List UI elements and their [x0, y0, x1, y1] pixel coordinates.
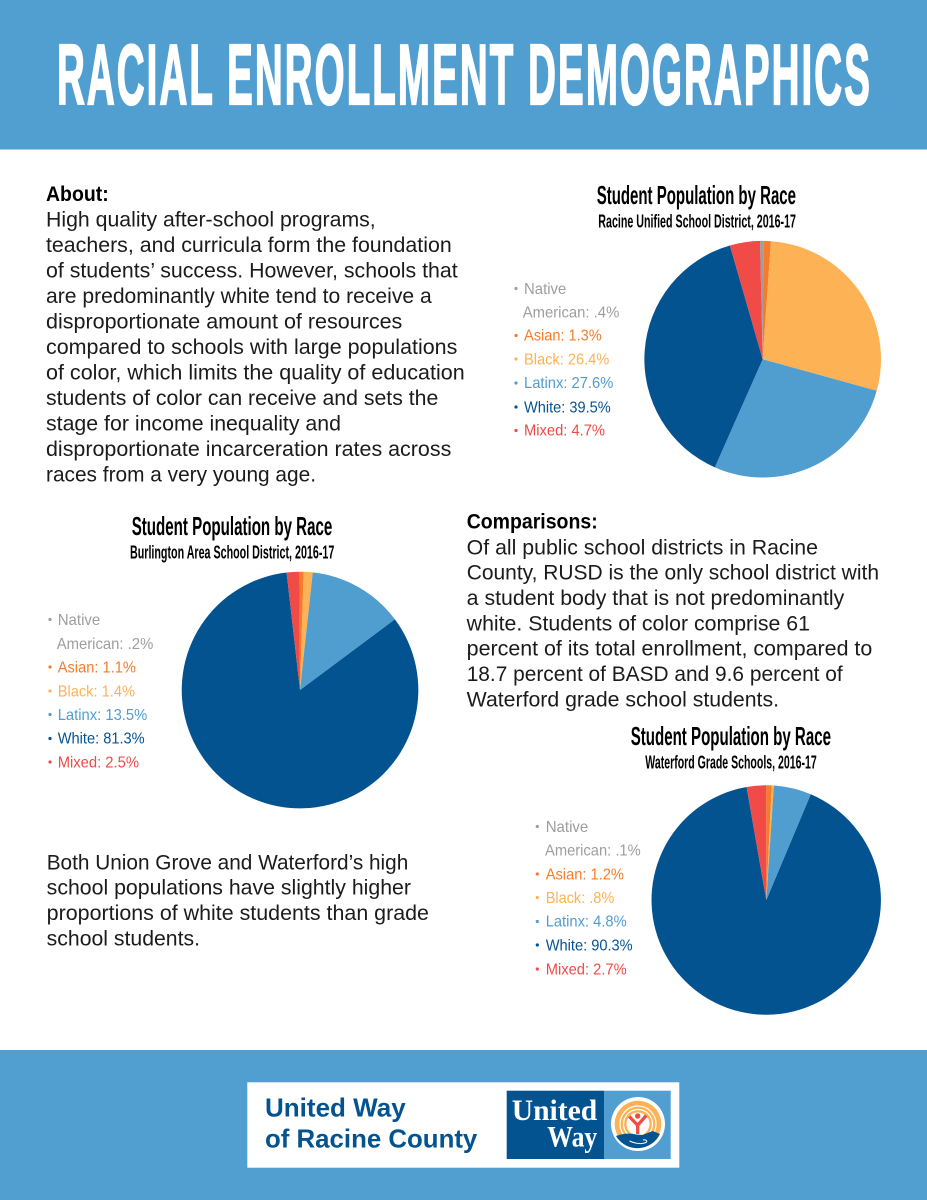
pie chart: Burlington [182, 572, 418, 808]
text block: about: students of color can receive and sets the [46, 387, 438, 410]
legend: Racine: Mixed: 4.7% [524, 423, 605, 440]
text block: high school note: Both Union Grove and Waterford’s high [47, 851, 408, 874]
text block: high school note: school populations have slightly higher [47, 877, 411, 900]
text block: comparisons: Of all public school districts in Racine [467, 536, 818, 559]
legend: Racine: Latinx: 27.6% [524, 375, 613, 392]
chart panel: Racine Unified School District [514, 180, 881, 477]
legend: Waterford: Asian: 1.2% [546, 866, 624, 883]
United Way logo: Way [547, 1121, 597, 1154]
chart panel: Burlington Area School District [48, 511, 418, 808]
legend: Racine: Native [524, 281, 566, 298]
legend: Burlington: White: 81.3% [58, 731, 145, 748]
organization name [265, 1093, 478, 1153]
chart heading: Burlington [130, 511, 334, 562]
legend: Racine [514, 281, 619, 440]
title: RACIAL ENROLLMENT DEMOGRAPHICS [57, 28, 872, 123]
text block: high school note: school students. [47, 927, 200, 950]
legend: Waterford: Mixed: 2.7% [546, 961, 627, 978]
pie chart: Waterford [652, 785, 881, 1015]
text block: about: About: [46, 183, 109, 206]
text block: comparisons: County, RUSD is the only school district with [467, 562, 879, 585]
legend: Burlington: Black: 1.4% [58, 683, 135, 700]
organization name: of Racine County [265, 1123, 478, 1153]
legend: Waterford: Latinx: 4.8% [546, 914, 627, 931]
text block: comparisons: 18.7 percent of BASD and 9.6 percent of [467, 663, 843, 686]
legend: Burlington: Asian: 1.1% [58, 660, 136, 677]
text block: comparisons: percent of its total enrollment, compared to [467, 638, 872, 661]
text block: comparisons: Waterford grade school students. [467, 688, 779, 711]
text block: about [46, 183, 465, 486]
text block: about: compared to schools with large populations [46, 336, 457, 359]
legend: Burlington: American: .2% [57, 636, 153, 653]
header banner [0, 0, 927, 150]
logo card [247, 1082, 679, 1168]
chart heading: Burlington: Student Population by Race [132, 511, 332, 541]
text block: about: disproportionate incarceration rates across [46, 438, 451, 461]
text block: comparisons: Comparisons: [467, 510, 598, 533]
text block: about: High quality after-school programs, [46, 209, 376, 232]
text block: about: teachers, and curricula form the foundation [46, 234, 452, 257]
legend: Waterford [536, 819, 641, 978]
footer banner [0, 1050, 927, 1200]
chart heading: Waterford [631, 721, 831, 772]
organization name: United Way [265, 1093, 406, 1123]
text block: high school note [47, 851, 429, 950]
legend: Waterford: White: 90.3% [546, 937, 633, 954]
legend: Racine: American: .4% [523, 305, 619, 322]
legend: Waterford: American: .1% [545, 843, 641, 860]
legend: Waterford: Native [546, 819, 588, 836]
legend: Burlington: Native [58, 612, 100, 629]
text block: about: stage for income inequality and [46, 412, 341, 435]
legend: Burlington: Latinx: 13.5% [58, 707, 147, 724]
icon: rainbow, person and helping hand [611, 1097, 665, 1151]
legend: Burlington: Mixed: 2.5% [58, 755, 139, 772]
chart panel: Waterford Grade Schools [536, 721, 881, 1015]
chart heading: Racine: Racine Unified School District, 2016-17 [598, 211, 796, 231]
text block: about: races from a very young age. [46, 463, 316, 486]
legend: Burlington [48, 612, 153, 772]
text block: about: of color, which limits the quality of education [46, 362, 465, 384]
text block: about: of students’ success. However, schools that [46, 260, 458, 283]
text block: comparisons: a student body that is not predominantly [467, 587, 845, 610]
text block: about: disproportionate amount of resources [46, 311, 402, 334]
United Way logo [507, 1091, 671, 1159]
legend: Racine: Asian: 1.3% [524, 328, 602, 345]
legend: Racine: Black: 26.4% [524, 351, 609, 368]
text block: about: are predominantly white tend to receive a [46, 285, 432, 308]
text block: comparisons [466, 510, 879, 711]
text block: comparisons: white. Students of color comprise 61 [466, 612, 810, 635]
text block: high school note: proportions of white students than grade [47, 902, 429, 925]
chart heading: Racine [597, 180, 796, 231]
legend: Racine: White: 39.5% [524, 399, 611, 416]
pie chart: Racine [644, 241, 881, 477]
legend: Waterford: Black: .8% [546, 890, 614, 907]
United Way logo: United [512, 1094, 598, 1127]
chart heading: Burlington: Burlington Area School District, 2016-17 [130, 542, 334, 562]
